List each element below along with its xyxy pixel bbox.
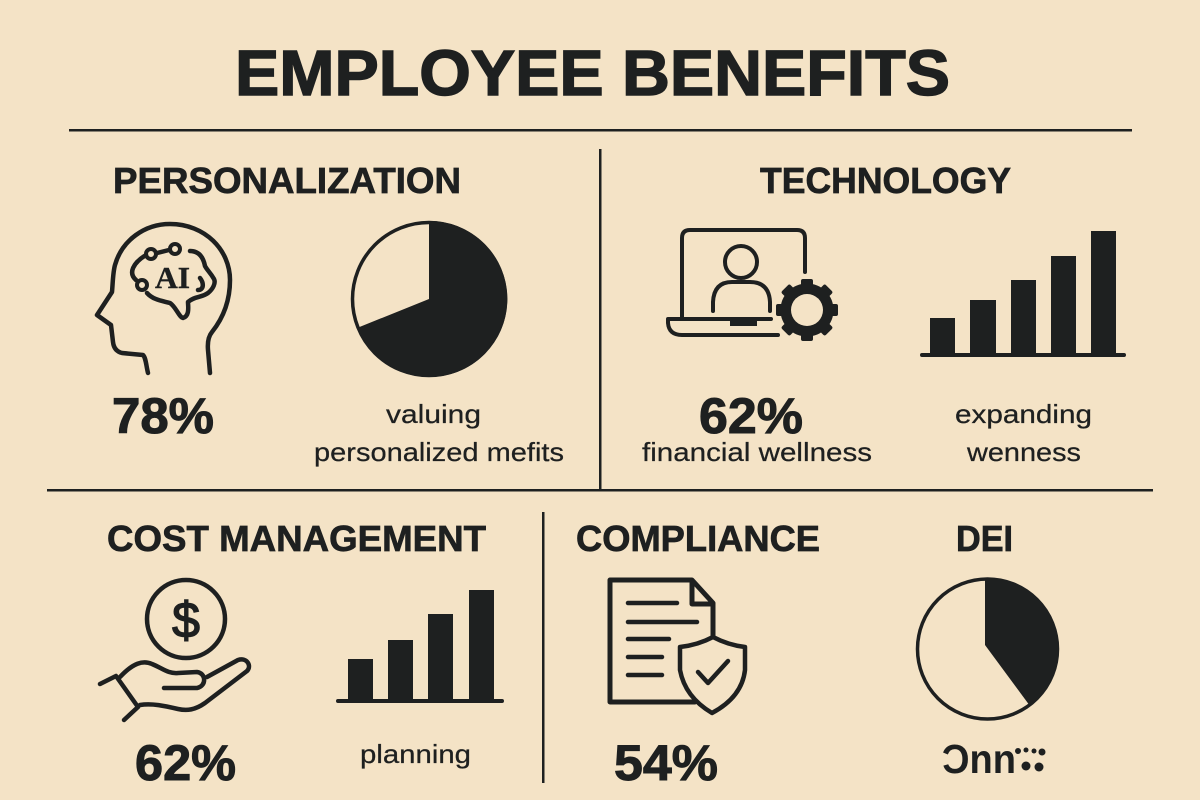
icon: AI head: AI <box>155 260 190 295</box>
icon: hand holding coin: $ <box>172 592 200 648</box>
heading: DEI: DEI <box>956 518 1013 559</box>
caption: personalization: personalized mefits <box>314 437 564 467</box>
panel: personalization <box>97 160 564 467</box>
title: EMPLOYEE BENEFITS <box>235 37 950 109</box>
panel: technology <box>642 160 1126 467</box>
panel: compliance <box>576 518 820 791</box>
panel: cost management <box>100 518 504 791</box>
caption: personalization: valuing <box>386 399 481 429</box>
caption: expanding: expanding <box>955 399 1092 429</box>
heading: compliance: COMPLIANCE <box>576 518 820 559</box>
stat: 54%: 54% <box>614 735 718 791</box>
icon: hand holding coin <box>100 580 249 720</box>
bar chart: technology <box>920 231 1126 357</box>
caption: planning: planning <box>360 739 471 769</box>
heading: cost management: COST MANAGEMENT <box>107 518 486 559</box>
icon: AI head <box>97 224 230 373</box>
stat: 62%: 62% <box>135 735 236 791</box>
pie chart: DEI <box>918 578 1059 719</box>
panel: DEI <box>918 518 1059 782</box>
caption: illegible glyphs: Ɔnn <box>942 736 1016 782</box>
stat: 78%: 78% <box>112 388 214 444</box>
icon: laptop with user and gear <box>668 230 838 341</box>
heading: personalization: PERSONALIZATION <box>113 160 461 201</box>
icon: document with shield <box>610 580 745 713</box>
caption: expanding <box>955 399 1092 467</box>
heading: technology: TECHNOLOGY <box>760 160 1011 201</box>
caption: expanding: wenness <box>966 437 1081 467</box>
pie chart: personalization <box>352 221 507 377</box>
stat: 62%: 62% <box>699 388 803 444</box>
caption: financial wellness: financial wellness <box>642 437 872 467</box>
caption: personalization <box>314 399 564 467</box>
bar chart: cost management <box>336 590 504 703</box>
